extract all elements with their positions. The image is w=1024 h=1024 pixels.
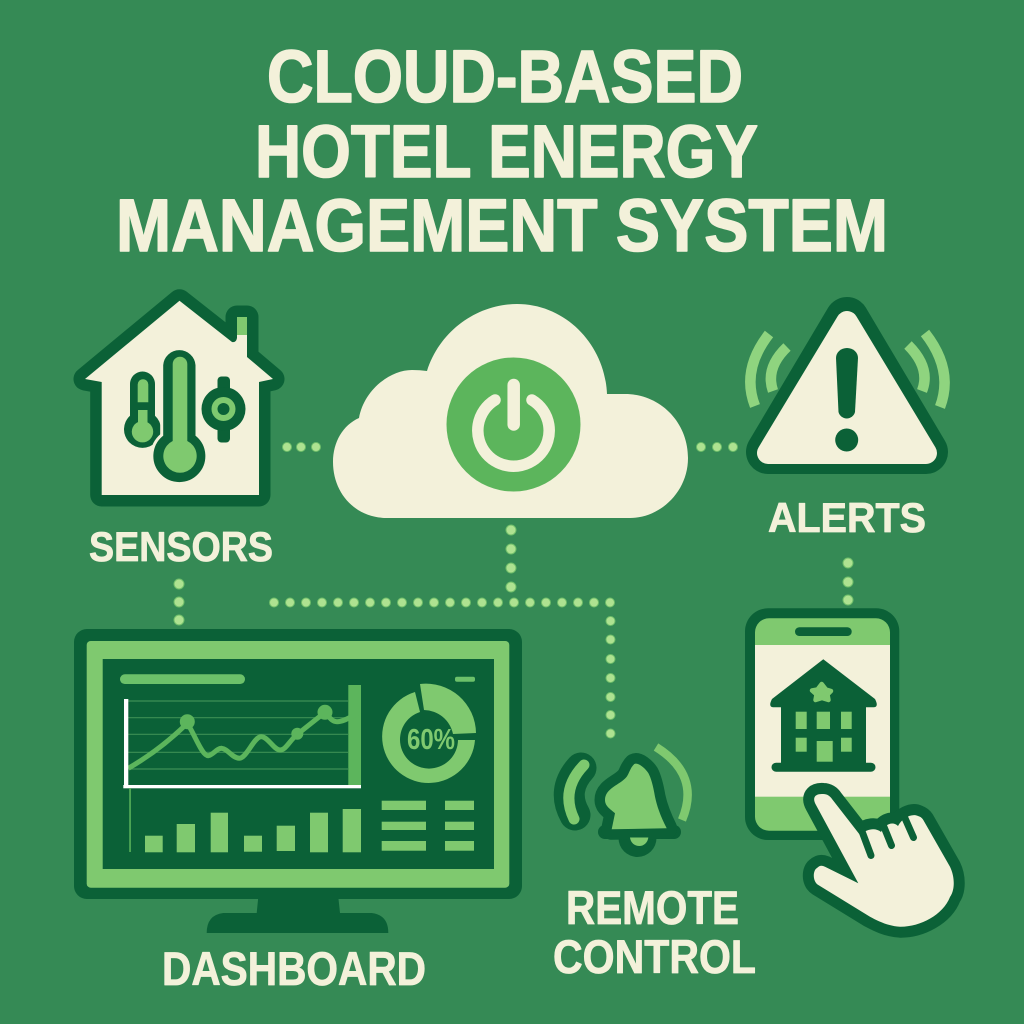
label: alerts: ALERTS <box>768 494 926 541</box>
line chart <box>123 685 361 788</box>
label: sensors: SENSORS <box>89 523 273 570</box>
icon: smartphone with hotel app <box>745 608 899 840</box>
label: remote control <box>553 881 756 983</box>
label: remote control: REMOTE <box>566 881 739 934</box>
icon: hotel building <box>770 659 877 772</box>
connector: cloud to alerts <box>696 442 738 452</box>
bar chart <box>129 788 361 852</box>
alert signal waves <box>750 333 945 407</box>
connector: sensors to dashboard <box>174 579 184 625</box>
donut chart 60%: 60% <box>407 724 455 756</box>
icon: remote control bell <box>569 747 688 857</box>
label: dashboard: DASHBOARD <box>162 942 426 995</box>
icon: pointing hand <box>814 794 954 927</box>
title: HOTEL ENERGY <box>255 110 758 193</box>
icon: dial gauge <box>202 376 246 442</box>
connector: alerts to phone <box>843 558 853 605</box>
connector: cloud to dashboard and remote control <box>270 525 615 738</box>
icon: sensors house <box>85 301 273 495</box>
title: MANAGEMENT SYSTEM <box>116 184 888 267</box>
dashboard monitor <box>74 629 522 933</box>
connector: sensors to cloud <box>282 442 320 452</box>
label: remote control: CONTROL <box>553 930 756 983</box>
title <box>116 35 888 267</box>
icon: alert triangle <box>750 319 945 453</box>
donut chart 60% <box>382 684 476 783</box>
title: CLOUD-BASED <box>267 35 743 118</box>
icon: cloud with power symbol <box>333 304 688 518</box>
icon: large thermometer <box>152 349 207 484</box>
icon: small thermometer <box>124 372 161 448</box>
data table rows <box>382 801 474 851</box>
